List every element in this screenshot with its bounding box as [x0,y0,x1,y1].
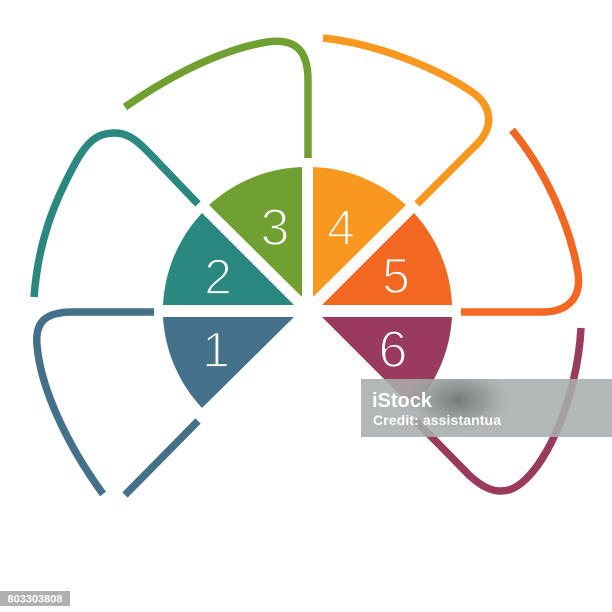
image id tag [0,591,70,606]
segment 4: amber wedge: 4 [327,200,355,256]
outline 6: plum curve [415,328,581,491]
outline 1: blue-grey curve [37,312,198,495]
segment 3: green wedge: 3 [261,199,289,257]
segment 3: green wedge [209,167,302,297]
segment 6: plum wedge [322,317,452,408]
segment 4: amber wedge [313,167,406,297]
outline 3: green curve [125,41,308,158]
outline 5: orange curve [461,130,579,312]
segment 5: orange wedge: 5 [382,248,410,304]
watermark credit text: Credit: assistantua [373,412,501,428]
segment 2: teal wedge: 2 [204,249,232,305]
outline 4: amber curve [323,38,489,204]
segment 1: blue-grey wedge: 1 [202,322,230,378]
segment 1: blue-grey wedge [163,317,294,408]
segment 6: plum wedge: 6 [379,321,407,379]
watermark logo text: iStock [372,390,433,412]
image id tag: 803303808 [7,594,63,606]
segment 2: teal wedge [163,213,294,305]
segment 5: orange wedge [322,213,452,305]
watermark band [361,379,612,437]
outline 2: teal curve [34,133,198,297]
